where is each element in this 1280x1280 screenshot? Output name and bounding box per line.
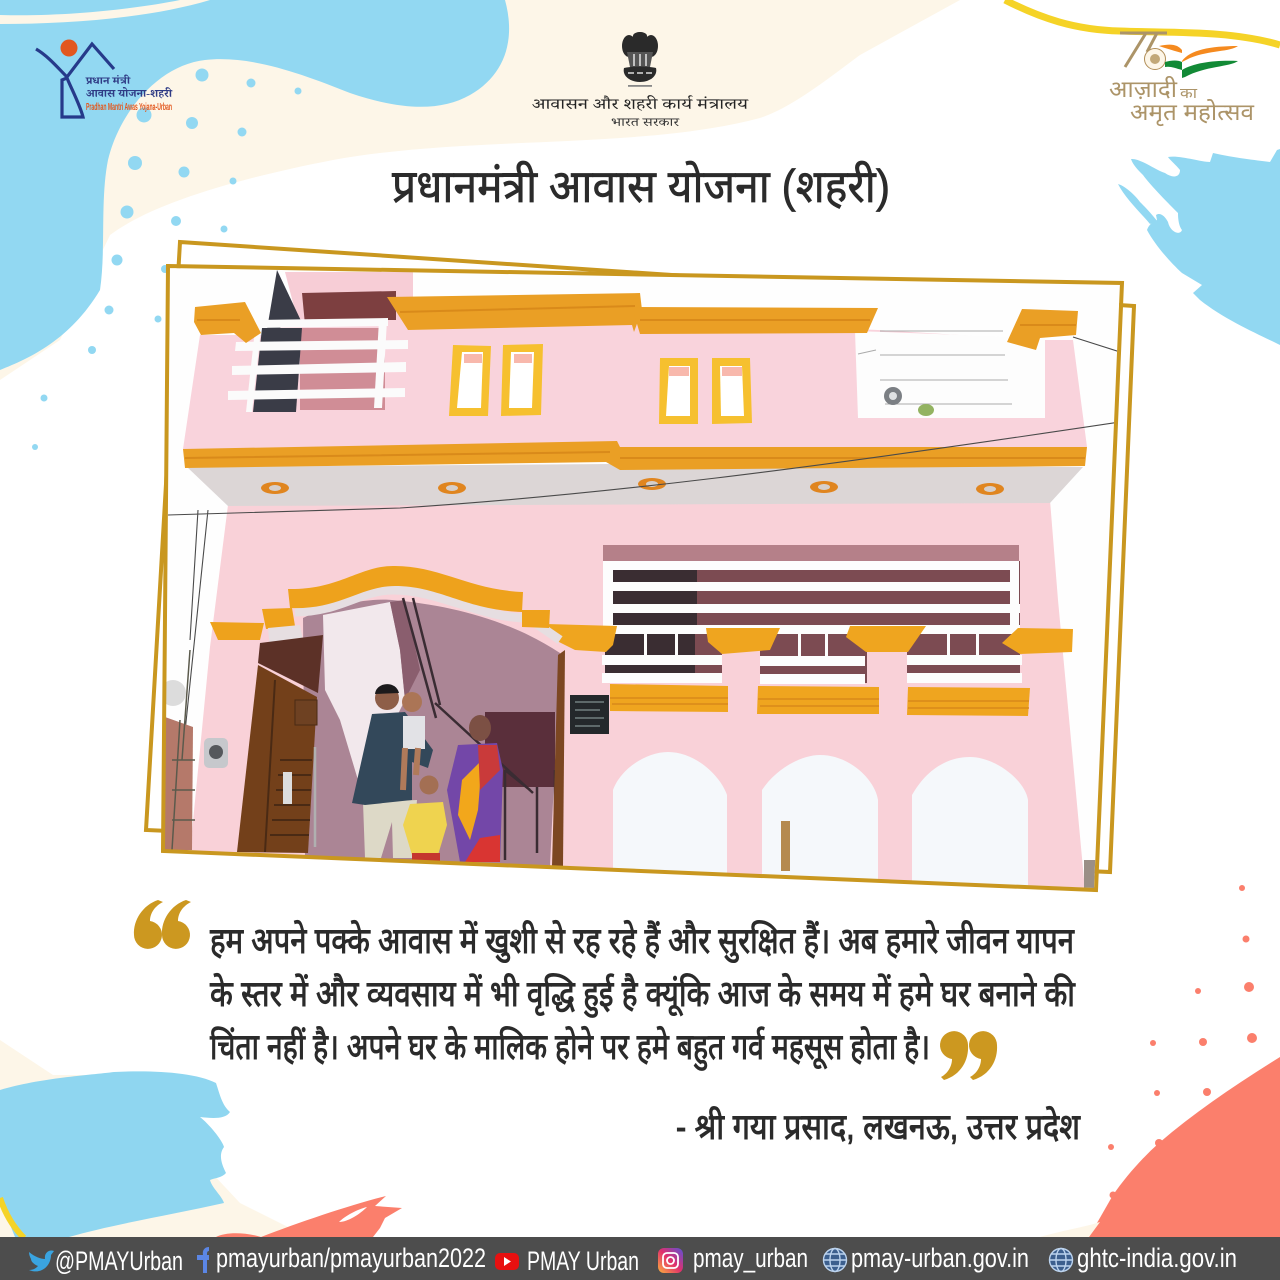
quote text [210, 920, 1076, 1071]
ceiling lamps [261, 478, 1004, 495]
staircase [323, 602, 405, 780]
emblem: national emblem of India [622, 32, 658, 87]
cap moulding lines [197, 306, 1076, 325]
bracket moulding lines [610, 698, 1029, 708]
back room dark door [485, 712, 555, 787]
upper windows [449, 344, 752, 424]
quote mark: closing [940, 1031, 997, 1080]
background shape: salmon sweep bottom right [1089, 1057, 1280, 1237]
logo: PMAY Urban [36, 40, 173, 117]
background dots: blue [32, 68, 302, 450]
orange window brackets [546, 624, 1073, 716]
lower storey wall [190, 500, 1085, 890]
background shape: blue splash bottom left [0, 1071, 230, 1237]
footer bar [0, 1237, 1280, 1280]
girl [403, 776, 447, 861]
electric wires [168, 336, 1117, 725]
icon: globe [824, 1248, 846, 1272]
arch underside [295, 590, 560, 640]
website pmay: pmay-urban.gov.in [851, 1243, 1029, 1273]
parapet caps [194, 293, 1078, 350]
background shape: cream wash top [0, 0, 960, 380]
upper storey wall [183, 320, 1087, 449]
photo: family in front of PMAY house [150, 260, 1130, 900]
website ghtc: ghtc-india.gov.in [1077, 1243, 1237, 1273]
background stroke: yellow curve top right [1005, 0, 1280, 45]
photo back frame [146, 242, 1134, 872]
baby [402, 692, 425, 790]
quote line 3: चिंता नहीं है। अपने घर के मालिक होने पर हमे बहुत गर्व महसूस होता है। [210, 1026, 930, 1071]
background shape: salmon streak [216, 1196, 402, 1237]
icon: facebook [197, 1247, 209, 1273]
brick wall and meter [160, 650, 228, 850]
background shape: cream wash bottom left [0, 1040, 290, 1237]
background stripe: white curve top left [0, 0, 210, 24]
photo front frame [163, 266, 1122, 890]
attribution: - श्री गया प्रसाद, लखनऊ, उत्तर प्रदेश [676, 1106, 1080, 1147]
background shape: blue splash right [1118, 149, 1280, 345]
icon: globe [1050, 1248, 1072, 1272]
quote line 2: के स्तर में और व्यवसाय में भी वृद्धि हुई है क्यूंकि आज के समय में हमे घर बनाने की [210, 973, 1076, 1018]
stair railing [403, 598, 555, 860]
ceiling slab [187, 464, 1083, 506]
stair column dark [390, 600, 420, 700]
wooden post [781, 821, 790, 871]
door frame right [552, 650, 565, 866]
background shape: cream wash bottom right [1040, 1222, 1100, 1237]
icon: youtube [495, 1253, 519, 1270]
first floor band [183, 441, 1087, 470]
wooden door [237, 635, 323, 853]
quote line 1: हम अपने पक्के आवास में खुशी से रह रहे हैं और सुरक्षित हैं। अब हमारे जीवन यापन [210, 920, 1075, 963]
man [352, 684, 433, 858]
left wall pillar [193, 640, 258, 852]
logo: Azadi ka Amrit Mahotsav [1109, 33, 1255, 127]
icon: twitter [29, 1250, 54, 1271]
grille window [602, 545, 1022, 690]
background stroke: yellow corner curve [0, 1198, 24, 1238]
logo: PMAY Urban: प्रधान मंत्री [85, 74, 131, 87]
logo: Azadi ka Amrit Mahotsav: आज़ादी [1109, 76, 1178, 102]
arch moulding [210, 566, 550, 648]
upper storey tower [267, 270, 413, 328]
title: प्रधानमंत्री आवास योजना (शहरी) [392, 160, 890, 212]
background shape: blue blob top left [0, 0, 509, 370]
logo: PMAY Urban: Pradhan Mantri Awas Yojana-Urban [86, 102, 172, 113]
upper roof white railing [855, 331, 1045, 418]
logo: PMAY Urban: आवास योजना-शहरी [86, 87, 173, 100]
icon: instagram [658, 1248, 683, 1273]
instagram handle: pmay_urban [693, 1243, 808, 1273]
quote mark: opening [134, 900, 191, 949]
right wall post [1084, 860, 1096, 888]
entrance porch interior [303, 600, 560, 866]
background dots: salmon [1108, 885, 1257, 1198]
facebook handle: pmayurban/pmayurban2022 [216, 1243, 486, 1273]
youtube handle: PMAY Urban [527, 1246, 639, 1276]
logo: Azadi ka Amrit Mahotsav: का [1180, 85, 1197, 101]
ministry name: आवासन और शहरी कार्य मंत्रालय [532, 95, 750, 113]
left railing [228, 318, 408, 412]
plaque [570, 695, 609, 734]
woman [447, 715, 503, 862]
logo: Azadi ka Amrit Mahotsav: अमृत महोत्सव [1130, 99, 1255, 127]
twitter handle: @PMAYUrban [55, 1246, 183, 1276]
blind arches [613, 752, 1028, 890]
band moulding lines [185, 452, 1085, 458]
government of India label: भारत सरकार [611, 115, 680, 129]
